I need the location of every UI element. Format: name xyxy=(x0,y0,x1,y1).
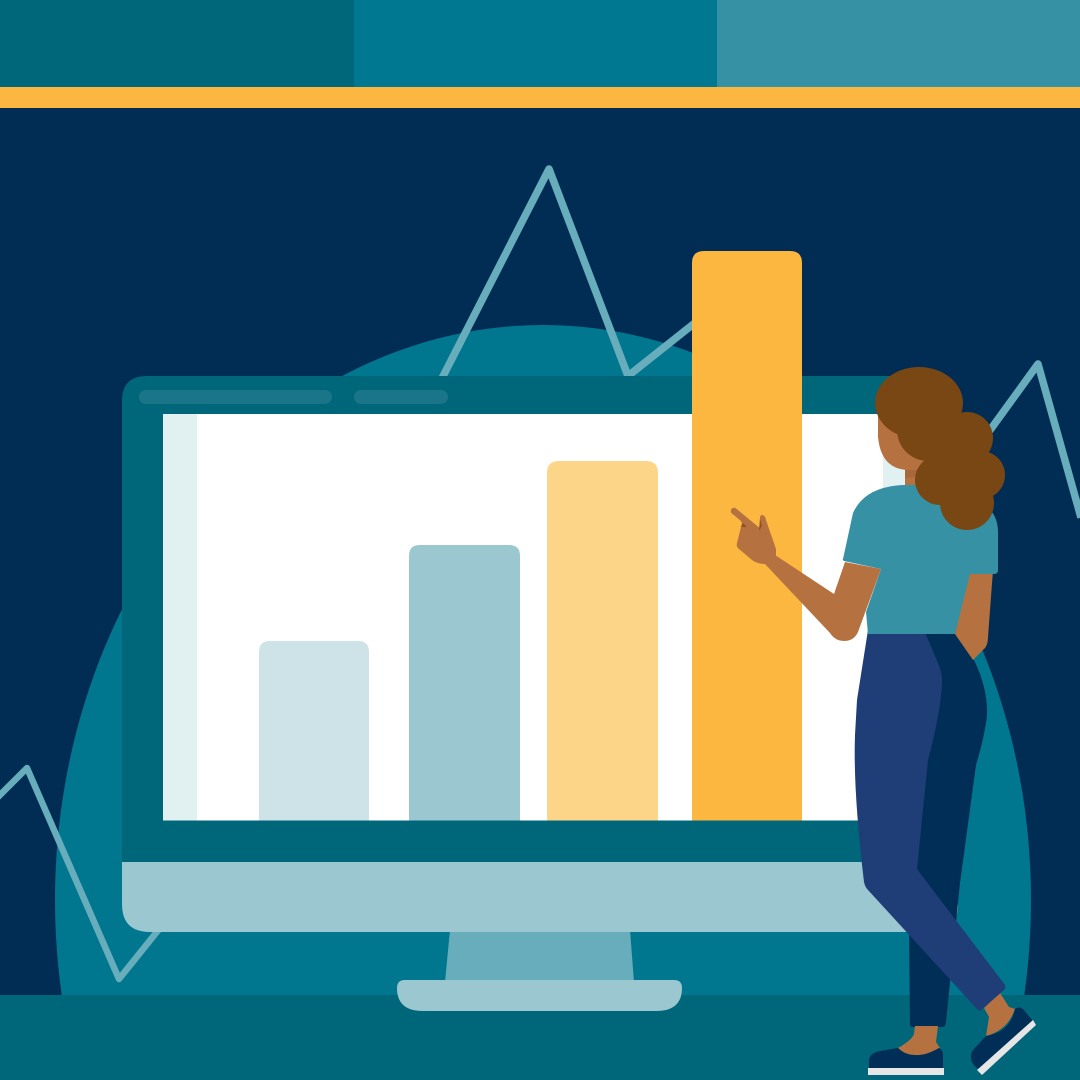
back foot skin xyxy=(898,1026,940,1055)
monitor xyxy=(122,376,958,932)
back shoe sole xyxy=(868,1068,944,1075)
front shoe xyxy=(971,1008,1033,1069)
rounded teal hill xyxy=(55,325,1031,995)
screen right strip xyxy=(883,414,917,820)
monitor frame xyxy=(122,376,958,862)
background line chart xyxy=(0,169,1080,979)
hand xyxy=(735,511,776,564)
bar 1 xyxy=(259,641,369,820)
back arm xyxy=(955,570,993,660)
bar chart xyxy=(259,251,802,820)
yellow stripe xyxy=(0,87,1080,108)
monitor stand foot xyxy=(397,980,682,1011)
face xyxy=(878,415,940,470)
back shoe xyxy=(869,1048,943,1069)
ground xyxy=(0,995,1080,1080)
toolbar pill short xyxy=(354,390,448,404)
neck xyxy=(905,455,927,495)
hair xyxy=(875,367,1005,530)
neck shadow xyxy=(905,466,925,478)
top colour band xyxy=(0,0,1080,87)
woman xyxy=(734,367,1036,1075)
front leg xyxy=(855,630,1005,1010)
finger shadow xyxy=(741,519,762,531)
toolbar pill long xyxy=(139,390,332,404)
bar 2 xyxy=(409,545,520,820)
monitor stand neck xyxy=(445,930,634,982)
screen xyxy=(163,414,917,820)
screen left strip xyxy=(163,414,197,820)
bar 3 xyxy=(547,461,658,820)
bar 4 xyxy=(692,251,802,820)
front shoe sole xyxy=(977,1020,1036,1075)
shirt xyxy=(843,485,998,634)
back leg xyxy=(909,634,987,1027)
front foot skin xyxy=(984,993,1015,1036)
pointing arm xyxy=(765,555,881,641)
pointing finger xyxy=(734,511,757,530)
monitor chin xyxy=(122,862,958,932)
